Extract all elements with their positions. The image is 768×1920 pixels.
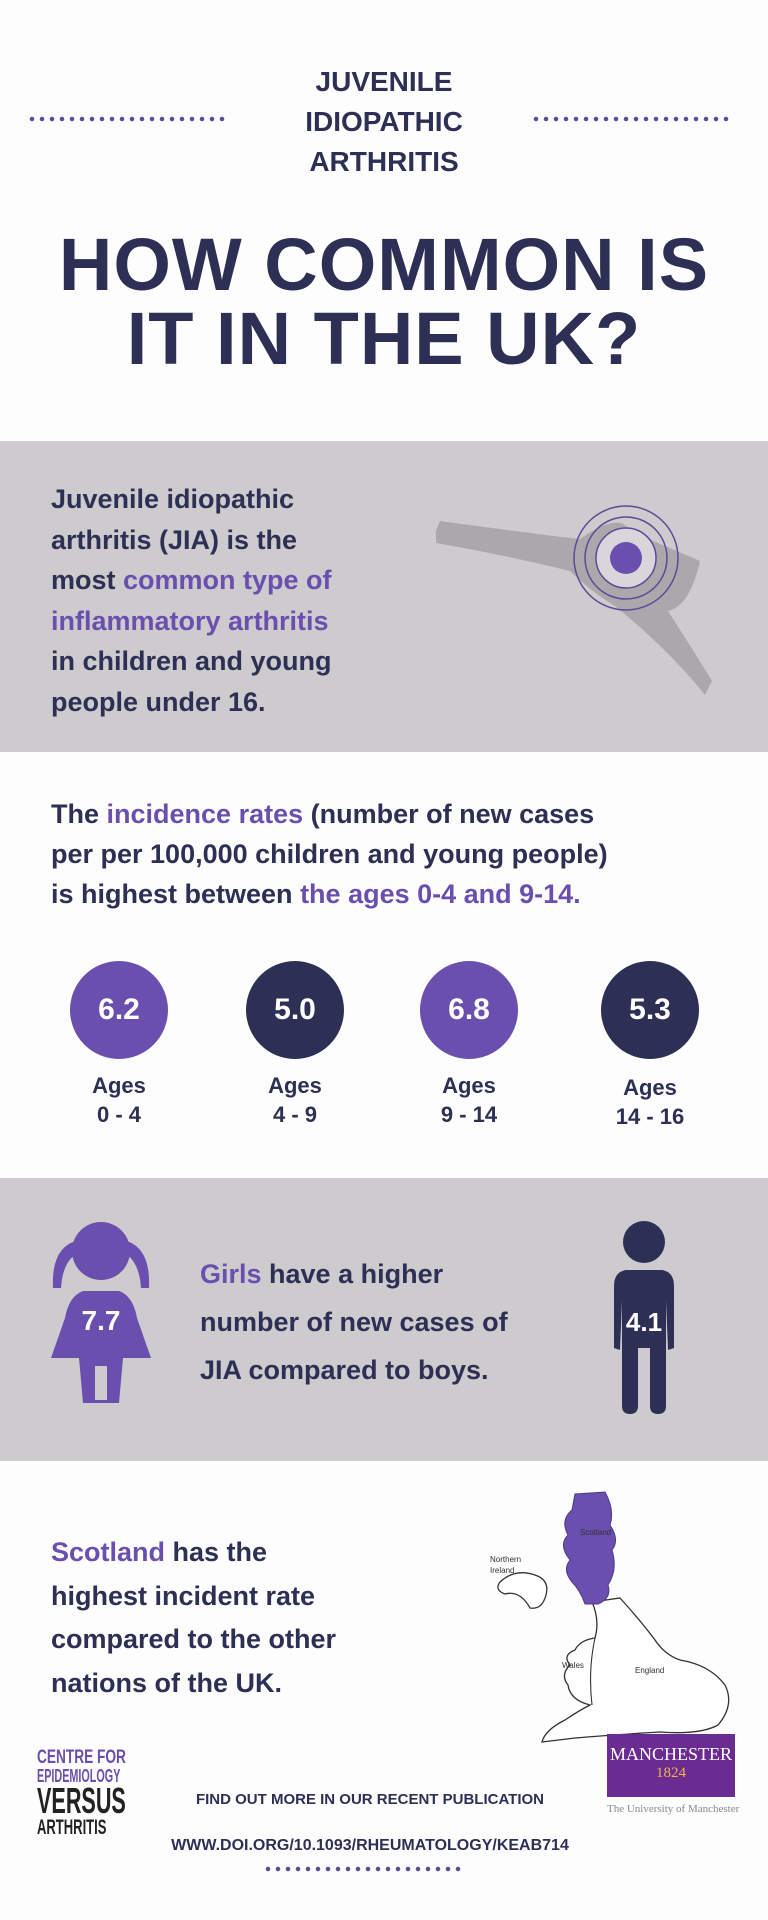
logo: university of manchester: MANCHESTER: [610, 1744, 732, 1764]
definition text: in children and young: [51, 646, 332, 676]
dotted line left: [27, 116, 227, 122]
panel: girls vs boys: [0, 1178, 768, 1461]
logo: centre for epidemiology: EPIDEMIOLOGY: [37, 1766, 120, 1786]
circle: ages 4-9: [246, 961, 344, 1059]
incidence text: per per 100,000 children and young people): [51, 839, 608, 869]
label: ages 4-9: 4 - 9: [273, 1102, 317, 1127]
definition text: inflammatory arthritis: [51, 606, 329, 636]
logo: university of manchester: The University of Manchester: [607, 1803, 739, 1815]
circle: ages 14-16: 5.3: [629, 993, 671, 1026]
label: ages 9-14: [441, 1073, 497, 1127]
definition text: people under 16.: [51, 686, 266, 716]
definition text: Juvenile idiopathic: [51, 484, 294, 514]
header subtitle: ARTHRITIS: [309, 146, 459, 177]
publication heading: FIND OUT MORE IN OUR RECENT PUBLICATION: [196, 1791, 544, 1808]
circle: ages 0-4: [70, 961, 168, 1059]
logo: centre for epidemiology: ARTHRITIS: [37, 1816, 106, 1839]
label: ages 14-16: 14 - 16: [616, 1104, 684, 1129]
map: UK: Wales: [562, 1661, 584, 1670]
logo: centre for epidemiology: CENTRE FOR: [37, 1747, 126, 1768]
circle: ages 9-14: [420, 961, 518, 1059]
label: ages 4-9: Ages: [268, 1073, 322, 1098]
map: UK: Ireland: [490, 1566, 514, 1575]
definition text: [51, 484, 332, 716]
main title: HOW COMMON IS: [59, 223, 709, 306]
publication url: WWW.DOI.ORG/10.1093/RHEUMATOLOGY/KEAB714: [171, 1837, 569, 1854]
icon: inflamed joint: [436, 505, 712, 695]
label: ages 9-14: Ages: [442, 1073, 496, 1098]
header subtitle: IDIOPATHIC: [305, 106, 463, 137]
scotland text: highest incident rate: [51, 1580, 315, 1610]
icon: girl 7.7: [51, 1222, 151, 1403]
circle: ages 9-14: 6.8: [448, 993, 490, 1026]
girls text: [200, 1259, 508, 1385]
map: UK: Northern: [490, 1555, 521, 1564]
icon: girl 7.7: 7.7: [82, 1305, 120, 1336]
label: ages 4-9: [268, 1073, 322, 1127]
label: ages 0-4: [92, 1073, 146, 1127]
circle: ages 0-4: 6.2: [98, 993, 140, 1026]
scotland text: [51, 1537, 336, 1698]
label: ages 14-16: Ages: [623, 1075, 677, 1100]
incidence text: [51, 799, 608, 909]
header subtitle: JUVENILE: [316, 66, 452, 97]
incidence text: The incidence rates (number of new cases: [51, 799, 594, 829]
logo: centre for epidemiology: VERSUS: [37, 1780, 126, 1821]
dotted line bottom: [263, 1866, 463, 1872]
label: ages 14-16: [616, 1075, 684, 1129]
panel: definition: [0, 441, 768, 752]
circle: ages 4-9: 5.0: [274, 993, 316, 1026]
logo: university of manchester: 1824: [656, 1765, 686, 1781]
definition text: most common type of: [51, 565, 332, 595]
main title: IT IN THE UK?: [127, 297, 641, 380]
logo: centre for epidemiology: [37, 1747, 126, 1839]
logo: university of manchester: [607, 1734, 740, 1815]
icon: boy 4.1: 4.1: [626, 1307, 662, 1337]
label: ages 0-4: Ages: [92, 1073, 146, 1098]
main title: [59, 223, 709, 380]
header subtitle: [305, 66, 463, 177]
dotted line right: [531, 116, 731, 122]
label: ages 0-4: 0 - 4: [97, 1102, 141, 1127]
scotland text: Scotland has the: [51, 1537, 267, 1567]
map: UK: Scotland: [580, 1528, 611, 1537]
girls text: number of new cases of: [200, 1307, 508, 1337]
scotland text: compared to the other: [51, 1624, 336, 1654]
definition text: arthritis (JIA) is the: [51, 524, 297, 554]
label: ages 9-14: 9 - 14: [441, 1102, 497, 1127]
girls text: JIA compared to boys.: [200, 1355, 489, 1385]
map: UK: England: [635, 1666, 664, 1675]
map: UK: [490, 1492, 730, 1743]
scotland text: nations of the UK.: [51, 1668, 282, 1698]
circle: ages 14-16: [601, 961, 699, 1059]
icon: boy 4.1: [614, 1221, 674, 1414]
incidence text: is highest between the ages 0-4 and 9-14.: [51, 879, 581, 909]
girls text: Girls have a higher: [200, 1259, 443, 1289]
